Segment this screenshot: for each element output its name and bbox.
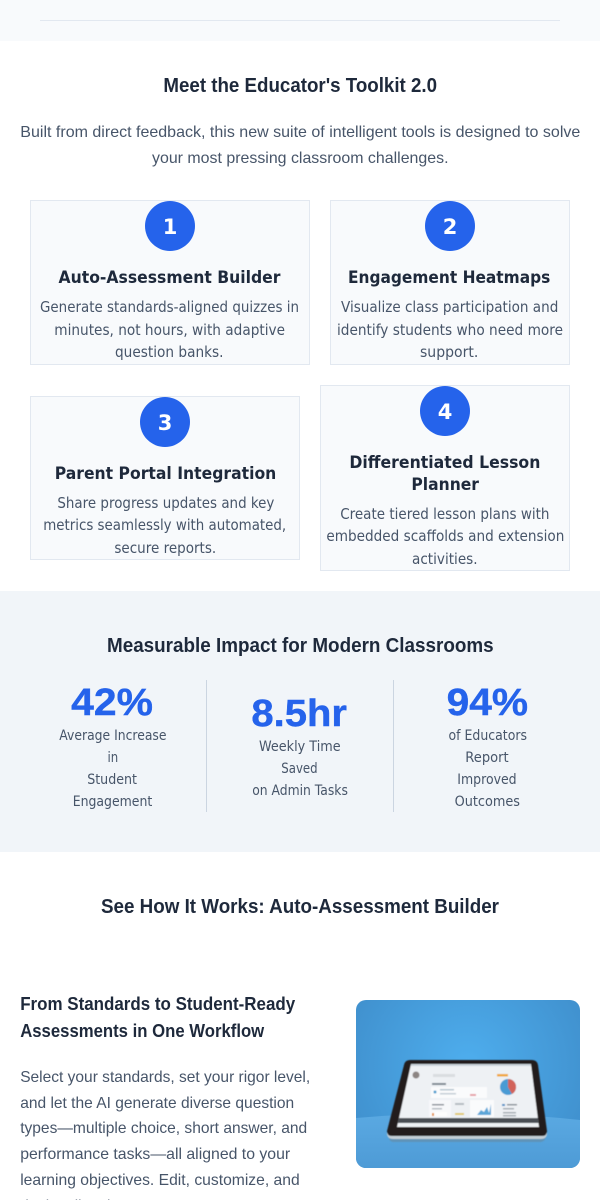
card 2 description: Visualize class participation and [341, 298, 558, 316]
top band [0, 0, 600, 41]
card 1 description [40, 298, 299, 361]
stat: 94% [447, 682, 528, 810]
stat: 42% [59, 682, 166, 810]
icon: number 1: 1 [163, 215, 177, 239]
panel: card 1 [30, 200, 310, 364]
subheading: workflow: Assessments in One Workflow [20, 1021, 265, 1041]
workflow paragraph: types—multiple choice, short answer, and [20, 1120, 307, 1137]
card 4 description: embedded scaffolds and extension [326, 527, 564, 545]
card 3 description: Share progress updates and key [57, 494, 275, 512]
card 2 description: identify students who need more [337, 321, 563, 339]
icon: number 1 [145, 201, 195, 251]
card 1 description: minutes, not hours, with adaptive [54, 321, 285, 339]
card 4 title [349, 453, 540, 495]
card 4 title: Planner [411, 475, 480, 495]
tablet screen [397, 1064, 539, 1127]
stat: 8.5hr: on Admin Tasks [252, 783, 348, 799]
stat: 94%: of Educators [448, 728, 527, 744]
card 1 description: question banks. [115, 343, 224, 361]
workflow paragraph: performance tasks—all aligned to your [20, 1146, 291, 1163]
stat: 94%: 94% [447, 682, 528, 724]
stat: 42%: 42% [71, 682, 153, 724]
heading: toolkit: Meet the Educator's Toolkit 2.0 [163, 75, 437, 97]
icon: number 2 [425, 201, 475, 251]
intro paragraph: your most pressing classroom challenges. [152, 150, 448, 167]
workflow paragraph: learning objectives. Edit, customize, and [20, 1172, 300, 1189]
stat: 94%: Report [465, 750, 509, 766]
card 2 description [337, 298, 563, 361]
stat: 8.5hr: Saved [281, 761, 318, 777]
card 2 title: Engagement Heatmaps [348, 268, 550, 288]
card 3 title: Parent Portal Integration [55, 464, 276, 484]
card 3 description: secure reports. [114, 539, 216, 557]
subheading: workflow [20, 994, 295, 1041]
icon: number 4 [420, 386, 470, 436]
intro paragraph [20, 124, 580, 167]
stat: 42%: Average Increase [59, 728, 166, 744]
icon: number 3: 3 [158, 411, 172, 435]
stat: 8.5hr: 8.5hr [251, 693, 347, 735]
stat: 94%: Outcomes [455, 794, 520, 810]
stat: 8.5hr [251, 693, 348, 799]
icon: number 3 [140, 397, 190, 447]
icon: number 2: 2 [443, 215, 457, 239]
card 4 description [326, 505, 564, 568]
panel: card 4 [320, 386, 570, 570]
workflow paragraph: and let the AI generate diverse question [20, 1095, 294, 1112]
workflow paragraph [20, 1069, 310, 1200]
card 1 title: Auto-Assessment Builder [58, 268, 281, 288]
heading: impact: Measurable Impact for Modern Classrooms [107, 635, 494, 657]
panel: card 2 [330, 200, 570, 364]
intro paragraph: Built from direct feedback, this new suite of intelligent tools is designed to solve [20, 124, 580, 141]
panel: measurable impact [0, 591, 600, 852]
icon: number 4: 4 [438, 400, 452, 424]
tablet body [389, 1138, 546, 1142]
card 4 title: Differentiated Lesson [349, 453, 540, 473]
panel: card 3 [30, 396, 300, 560]
stat: 42%: in [108, 750, 118, 766]
subheading: workflow: From Standards to Student-Ready [20, 994, 295, 1014]
card 2 description: support. [420, 343, 478, 361]
card 4 description: Create tiered lesson plans with [340, 505, 550, 523]
card 3 description [43, 494, 286, 557]
workflow paragraph: Select your standards, set your rigor level, [20, 1069, 310, 1086]
stat: 94%: Improved [457, 772, 517, 788]
card 3 description: metrics seamlessly with automated, [43, 516, 286, 534]
stat: 8.5hr: Weekly Time [259, 739, 341, 755]
stat: 42%: Engagement [73, 794, 153, 810]
card 1 description: Generate standards-aligned quizzes in [40, 298, 299, 316]
heading: see how it works: See How It Works: Auto-Assessment Builder [101, 896, 499, 918]
card 4 description: activities. [412, 550, 478, 568]
stat: 42%: Student [87, 772, 137, 788]
image: tablet on blue background [356, 1000, 580, 1168]
